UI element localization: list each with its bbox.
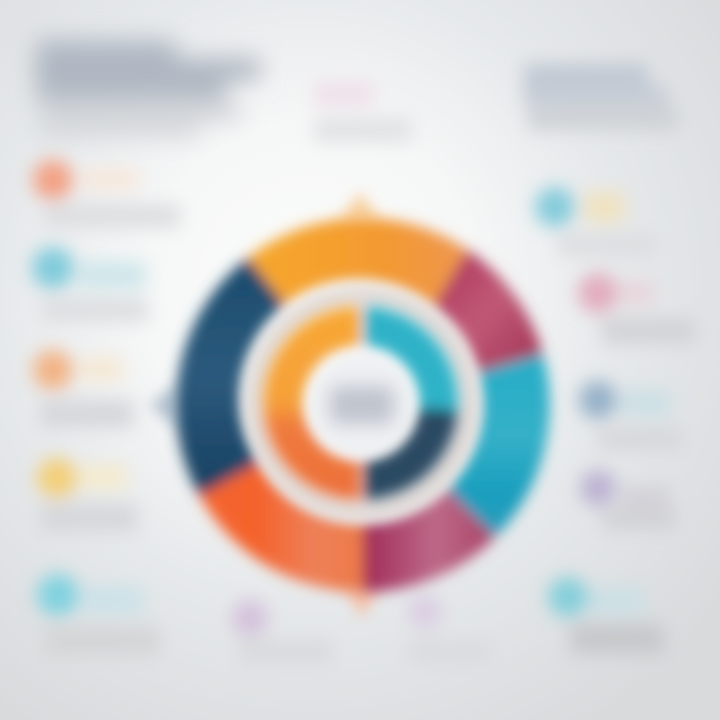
item: teal xyxy=(535,187,658,256)
chart knobs xyxy=(150,192,380,618)
item: cyan xyxy=(548,577,664,654)
segment: orange red xyxy=(199,462,363,592)
item: cyan xyxy=(37,574,160,656)
segment: crimson lower xyxy=(363,488,495,592)
item: pink xyxy=(578,273,696,344)
top-centre item xyxy=(314,82,412,142)
segment: crimson upper xyxy=(433,250,543,372)
inner segment: orange xyxy=(263,306,360,500)
inner ring xyxy=(263,306,458,500)
centre label xyxy=(330,386,394,424)
inner segment: dark xyxy=(364,408,458,500)
segment: navy xyxy=(176,258,285,496)
separator ring xyxy=(256,297,468,509)
item: teal xyxy=(32,247,148,322)
item: yellow xyxy=(37,458,138,532)
centre disc xyxy=(310,353,414,457)
outer ring xyxy=(176,218,550,592)
right column xyxy=(524,64,696,654)
right heading xyxy=(524,64,678,130)
bottom item: purple right xyxy=(408,595,492,664)
bottom item: purple left xyxy=(232,600,332,664)
left column items xyxy=(32,160,180,656)
item: blue xyxy=(579,381,682,450)
donut chart xyxy=(150,192,550,618)
segment: teal xyxy=(446,354,550,537)
item: purple xyxy=(580,470,676,530)
item: orange xyxy=(33,350,134,428)
heading: main title block xyxy=(36,40,260,138)
item: coral xyxy=(33,160,180,228)
segment: amber xyxy=(248,218,468,307)
inner segment: teal xyxy=(364,306,458,410)
